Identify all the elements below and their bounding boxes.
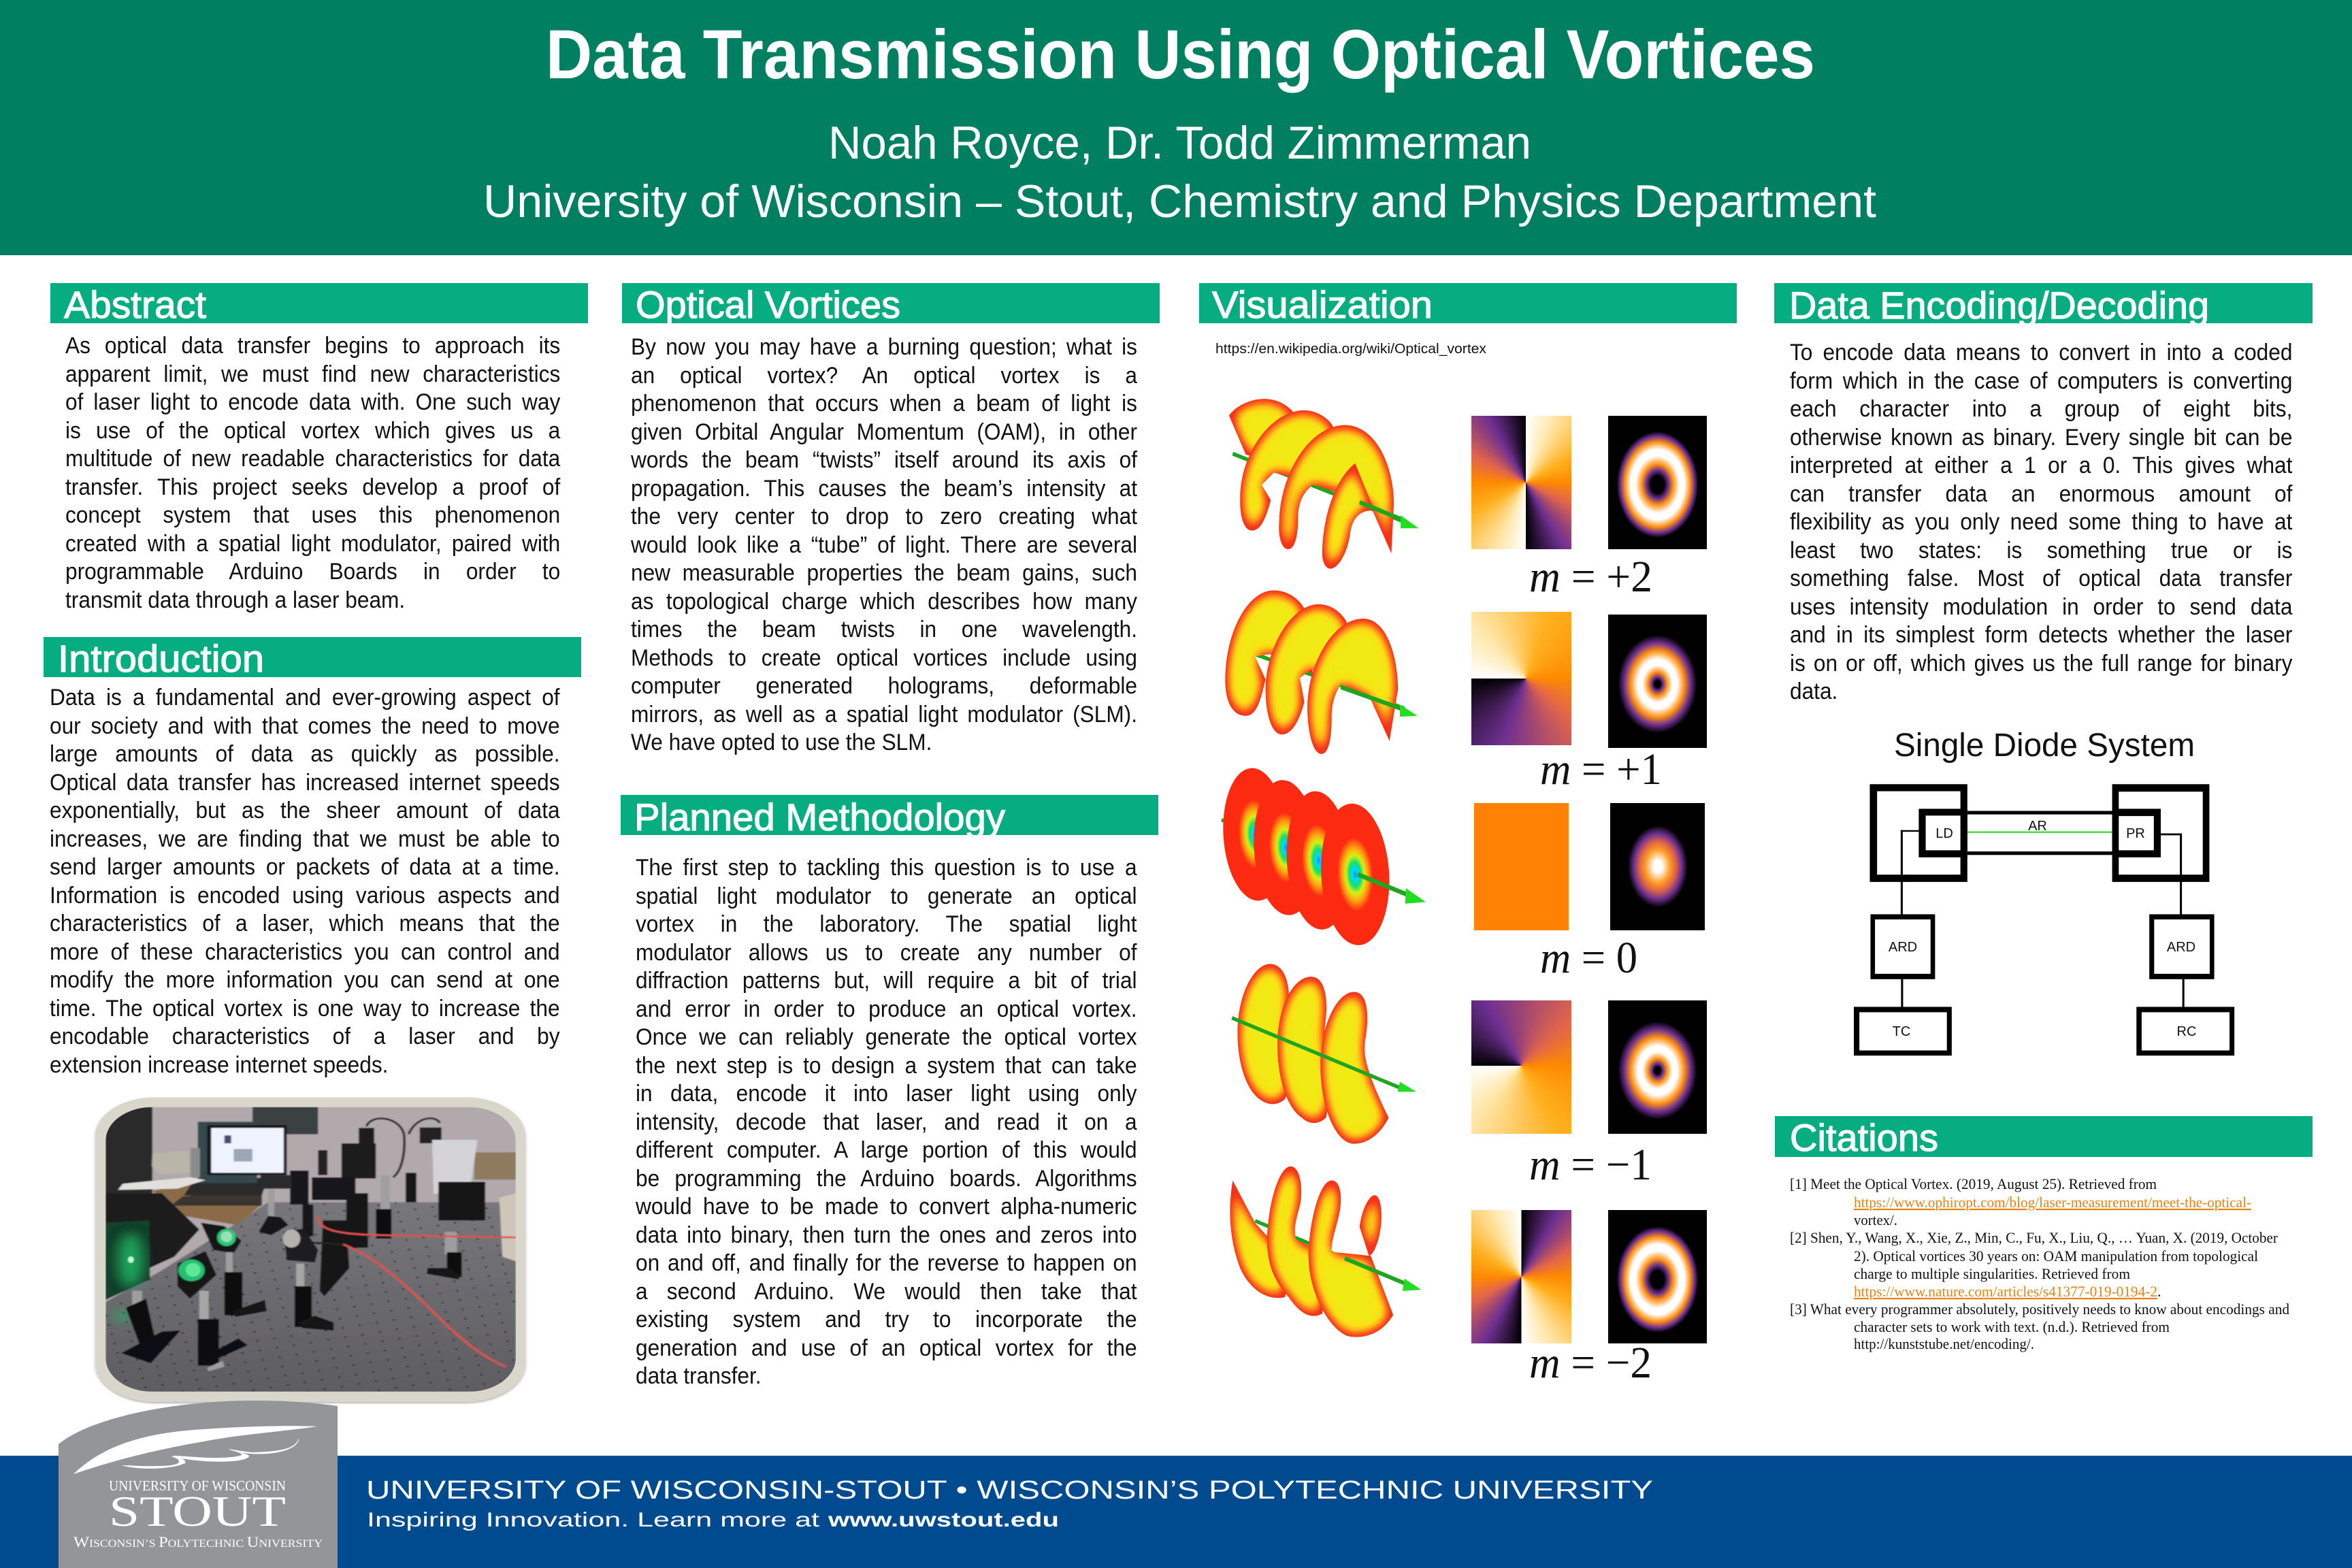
citations list: http://kunststube.net/encoding/.: [1854, 1335, 2034, 1352]
text: introduction: increases, we are finding that we must be able to: [50, 826, 560, 852]
citations list: [3] What every programmer absolutely, positively needs to know about encodings and: [1790, 1301, 2289, 1318]
heading: Visualization: [1199, 283, 1737, 326]
vortex row: m = -2: [1230, 1166, 1707, 1388]
text: optical vortices: computer generated holograms, deformable: [631, 673, 1137, 699]
diagram labels: RC: [2177, 1024, 2196, 1039]
logo: UW-Stout: UNIVERSITY OF WISCONSIN: [109, 1477, 286, 1494]
text: planned methodology: data into binary, then turn the ones and zeros into: [636, 1222, 1137, 1248]
label m=0: m = 0: [1540, 933, 1637, 983]
logo: UW-Stout: STOUT: [109, 1487, 286, 1535]
text: introduction: modify the more information you can send at one: [50, 967, 560, 993]
text: planned methodology: intensity, decode that laser, and read it on a: [636, 1109, 1137, 1135]
text: planned methodology: vortex in the laboratory. The spatial light: [636, 911, 1137, 937]
text: optical vortices: propagation. This causes the beam’s intensity at: [631, 475, 1137, 501]
intensity m=0: [1610, 803, 1705, 930]
text: planned methodology: would have to be made to convert alpha-numeric: [636, 1194, 1137, 1220]
label m=-2: m = −2: [1529, 1338, 1652, 1388]
text: introduction: more of these characteristics you can control and: [50, 939, 560, 965]
text: abstract: [65, 333, 561, 612]
text: planned methodology: the next step is to design a system that can take: [636, 1052, 1137, 1078]
text: planned methodology: The first step to tackling this question is to use a: [636, 855, 1137, 881]
intensity m=-2: [1608, 1210, 1707, 1343]
photo: laser lab bench: [95, 1097, 525, 1402]
diagram: Single Diode System: [1854, 728, 2234, 1056]
citations list: character sets to work with text. (n.d.). Retrieved from: [1854, 1318, 2170, 1335]
affiliation: University of Wisconsin – Stout, Chemistry and Physics Department: [483, 176, 1876, 227]
text: data encoding: least two states: is something true or is: [1790, 538, 2292, 564]
text: introduction: [50, 685, 560, 1078]
heading: Data Encoding/Decoding: Data Encoding/Decoding: [1789, 284, 2209, 327]
text: data encoding: otherwise known as binary. Every single bit can be: [1790, 425, 2292, 451]
text: introduction: Data is a fundamental and ever-growing aspect of: [50, 685, 560, 710]
text: planned methodology: different computer. A large portion of this would: [636, 1137, 1137, 1163]
footer slogan line: UNIVERSITY OF WISCONSIN-STOUT • WISCONSIN’S POLYTECHNIC UNIVERSITY: [366, 1476, 1653, 1505]
intensity m=+2: [1608, 416, 1707, 549]
citations list: https://www.ophiropt.com/blog/laser-measurement/meet-the-optical-: [1854, 1194, 2251, 1211]
text: data encoding: form which in the case of computers is converting: [1790, 368, 2292, 393]
text: planned methodology: a second Arduino. We would then take that: [636, 1278, 1137, 1304]
vortex row: m = +2: [1229, 399, 1707, 602]
text: optical vortices: Methods to create optical vortices include using: [631, 645, 1137, 671]
authors: Noah Royce, Dr. Todd Zimmerman: [828, 117, 1531, 169]
citations list: [2] Shen, Y., Wang, X., Xie, Z., Min, C., Fu, X., Liu, Q., … Yuan, X. (2019, October: [1790, 1229, 2278, 1246]
text: data encoding: To encode data means to convert in into a coded: [1790, 340, 2292, 365]
diagram labels: ARD: [2167, 940, 2195, 955]
text: data encoding: data.: [1790, 679, 1838, 704]
text: data encoding: and in its simplest form detects whether the laser: [1790, 622, 2292, 648]
citations list: https://www.nature.com/articles/s41377-019-0194-2: [1854, 1283, 2157, 1300]
text: optical vortices: [631, 334, 1138, 755]
text: planned methodology: data transfer.: [636, 1363, 762, 1389]
heading: Citations: Citations: [1790, 1116, 1938, 1159]
citations list: .: [2157, 1283, 2161, 1300]
text: planned methodology: be programming the Arduino boards. Algorithms: [636, 1165, 1137, 1191]
phase map m=0: [1474, 803, 1569, 930]
text: abstract: concept system that uses this phenomenon: [65, 502, 560, 528]
helix m=+2: [1229, 399, 1418, 569]
heading: Abstract: Abstract: [64, 283, 206, 326]
diagram labels: TC: [1893, 1024, 1910, 1039]
text: abstract: multitude of new readable characteristics for data: [65, 446, 560, 472]
text: planned methodology: Once we can reliably generate the optical vortex: [636, 1024, 1137, 1050]
text: planned methodology: diffraction patterns but, will require a bit of trial: [636, 968, 1137, 994]
text: optical vortices: given Orbital Angular Momentum (OAM), in other: [631, 419, 1137, 445]
text: introduction: our society and with that comes the need to move: [50, 713, 560, 739]
text: introduction: large amounts of data as quickly as possible.: [50, 741, 560, 767]
diagram boxes: [1854, 784, 2234, 1056]
citations list: vortex/.: [1854, 1211, 1897, 1228]
phase map m=-2: [1471, 1210, 1571, 1343]
footer band: [0, 1456, 2352, 1568]
citations list: [1] Meet the Optical Vortex. (2019, August 25). Retrieved from: [1790, 1175, 2157, 1192]
heading: Introduction: Introduction: [58, 637, 264, 680]
discs m=0: [1220, 766, 1426, 948]
text: planned methodology: on and off, and finally for the reverse to happen on: [636, 1250, 1137, 1276]
phase map m=+2: [1471, 416, 1571, 549]
text: optical vortices: times the beam twists in one wavelength.: [631, 617, 1137, 642]
text: data encoding: uses intensity modulation in order to send data: [1790, 593, 2292, 619]
helix m=+1: [1225, 591, 1418, 754]
diagram labels: ARD: [1889, 940, 1917, 955]
label m=-1: m = −1: [1529, 1140, 1652, 1190]
text: data encoding: interpreted at either a 1 or a 0. This gives what: [1790, 453, 2292, 478]
text: planned methodology: [636, 855, 1137, 1389]
heading: Optical Vortices: [622, 283, 1160, 326]
text: optical vortices: words the beam “twists” itself around its axis of: [631, 447, 1137, 473]
text: optical vortices: as topological charge which describes how many: [631, 588, 1137, 614]
citations list: [1790, 1175, 2289, 1352]
text: optical vortices: By now you may have a burning question; what is: [631, 334, 1137, 360]
text: optical vortices: would look like a “tube” of light. There are several: [631, 532, 1137, 558]
text: optical vortices: new measurable properties the beam gains, such: [631, 560, 1137, 586]
text: introduction: send larger amounts or packets of data at a time.: [50, 854, 560, 880]
text: planned methodology: in data, encode it into laser light using only: [636, 1081, 1137, 1107]
footer invitation line: Inspiring Innovation. Learn more at: [367, 1509, 820, 1531]
heading: Planned Methodology: [621, 795, 1158, 838]
vortex row: m = 0: [1220, 766, 1705, 983]
heading: Optical Vortices: Optical Vortices: [636, 283, 900, 326]
header banner: [0, 0, 2352, 255]
diagram labels: AR: [2028, 819, 2047, 834]
text: introduction: Information is encoded using various aspects and: [50, 882, 560, 908]
text: data encoding: can transfer data an enormous amount of: [1790, 480, 2292, 506]
text: planned methodology: modulator allows us to create any number of: [636, 939, 1137, 965]
diagram labels: LD: [1936, 826, 1953, 841]
logo: UW-Stout: [59, 1401, 338, 1568]
text: abstract: transfer. This project seeks develop a proof of: [65, 474, 560, 500]
diagram title: Single Diode System: [1894, 728, 2195, 764]
text: planned methodology: and error in order to produce an optical vortex.: [636, 996, 1137, 1022]
label m=+1: m = +1: [1540, 745, 1662, 794]
vortex row: m = -1: [1232, 964, 1707, 1190]
label m=+2: m = +2: [1529, 552, 1652, 602]
intensity m=+1: [1608, 615, 1707, 748]
text: abstract: of laser light to encode data with. One such way: [65, 389, 560, 415]
image source link: https://en.wikipedia.org/wiki/Optical_vortex: [1215, 342, 1486, 357]
text: planned methodology: spatial light modulator to generate an optical: [636, 883, 1137, 909]
title: Data Transmission Using Optical Vortices: [546, 16, 1815, 93]
text: introduction: exponentially, but as the sheer amount of data: [50, 798, 560, 823]
phase map m=+1: [1471, 612, 1571, 745]
heading: Planned Methodology: Planned Methodology: [634, 796, 1005, 838]
text: abstract: programmable Arduino Boards in order to: [65, 559, 560, 585]
vortex row: m = +1: [1225, 591, 1707, 794]
text: data encoding: flexibility as you only need some thing to have at: [1790, 509, 2292, 535]
text: data encoding: each character into a group of eight bits,: [1790, 396, 2292, 422]
text: abstract: is use of the optical vortex which gives us a: [65, 418, 560, 444]
helix m=-1: [1232, 964, 1416, 1144]
text: abstract: created with a spatial light modulator, paired with: [65, 531, 560, 557]
text: abstract: As optical data transfer begins to approach its: [65, 333, 560, 359]
text: abstract: transmit data through a laser beam.: [65, 587, 405, 612]
text: introduction: extension increase internet speeds.: [50, 1052, 388, 1078]
heading: Abstract: [50, 283, 588, 326]
citations list: charge to multiple singularities. Retrieved from: [1854, 1265, 2130, 1282]
footer invitation line: [367, 1509, 1059, 1531]
text: introduction: time. The optical vortex is one way to increase the: [50, 995, 560, 1021]
text: optical vortices: mirrors, as well as a spatial light modulator (SLM).: [631, 701, 1137, 727]
heading: Visualization: Visualization: [1212, 283, 1433, 326]
text: introduction: Optical data transfer has increased internet speeds: [50, 769, 560, 795]
logo: UW-Stout: WISCONSIN’S POLYTECHNIC UNIVERSITY: [74, 1533, 323, 1550]
heading: Introduction: [44, 637, 581, 680]
intensity m=-1: [1608, 1000, 1707, 1134]
text: data encoding: is on or off, which gives us the full range for binary: [1790, 651, 2292, 676]
citations list: 2). Optical vortices 30 years on: OAM manipulation from topological: [1854, 1247, 2258, 1264]
text: planned methodology: generation and use of an optical vortex for the: [636, 1335, 1137, 1361]
diagram labels: PR: [2126, 826, 2145, 841]
text: introduction: characteristics of a laser, which means that the: [50, 911, 560, 936]
helix m=-2: [1230, 1166, 1421, 1337]
footer invitation line: www.uwstout.edu: [828, 1509, 1059, 1531]
phase map m=-1: [1471, 1000, 1571, 1134]
text: optical vortices: phenomenon that occurs when a beam of light is: [631, 391, 1137, 416]
text: data encoding: something false. Most of optical data transfer: [1790, 566, 2292, 591]
text: optical vortices: an optical vortex? An optical vortex is a: [631, 362, 1137, 388]
text: data encoding: [1790, 340, 2292, 704]
text: optical vortices: We have opted to use the SLM.: [631, 730, 932, 755]
text: introduction: encodable characteristics of a laser and by: [50, 1024, 560, 1049]
diagram labels: [1889, 819, 2196, 1039]
text: abstract: apparent limit, we must find new characteristics: [65, 361, 560, 387]
heading: Citations: [1775, 1116, 2313, 1159]
text: planned methodology: existing system and try to incorporate the: [636, 1307, 1137, 1333]
text: optical vortices: the very center to drop to zero creating what: [631, 504, 1137, 529]
